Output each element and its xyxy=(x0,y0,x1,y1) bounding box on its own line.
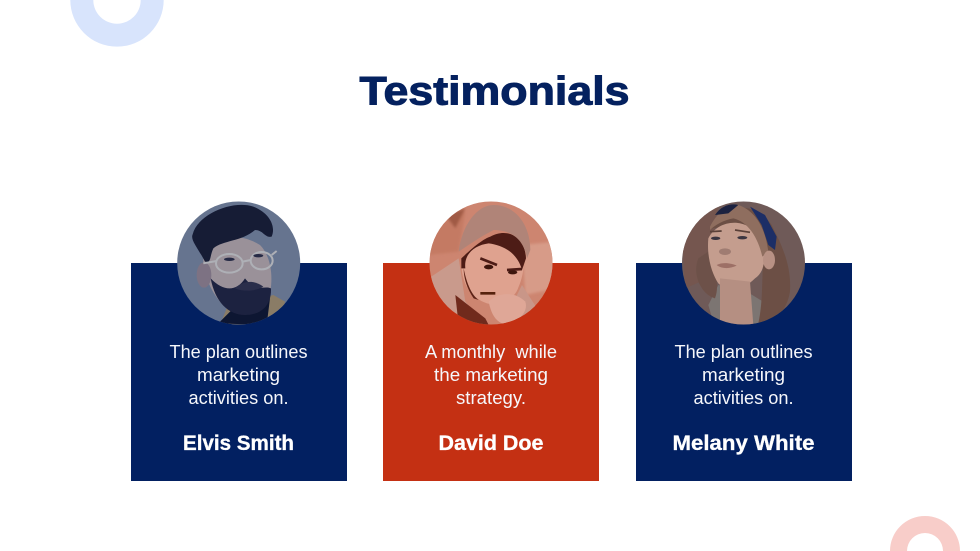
testimonial text xyxy=(425,342,557,408)
testimonial text: activities on. xyxy=(188,388,288,408)
decorative ring: top left xyxy=(70,0,164,47)
testimonial text: The plan outlines xyxy=(674,342,812,362)
testimonial text: The plan outlines xyxy=(170,342,308,362)
testimonial text: the marketing xyxy=(434,365,548,385)
card background xyxy=(636,263,852,481)
name: David Doe xyxy=(438,432,544,455)
title: Testimonials xyxy=(360,70,630,114)
testimonial text: strategy. xyxy=(456,388,526,408)
decorative ring: bottom right xyxy=(890,516,960,551)
testimonial text: marketing xyxy=(197,365,280,385)
portrait: Elvis Smith xyxy=(177,201,301,328)
name: Elvis Smith xyxy=(183,432,294,455)
testimonial text: marketing xyxy=(702,365,785,385)
panel: Elvis Smith xyxy=(131,201,347,481)
name: Melany White xyxy=(672,432,814,455)
testimonial text xyxy=(170,342,308,408)
panel: Melany White xyxy=(636,201,852,481)
panel: David Doe xyxy=(383,201,599,481)
card background xyxy=(131,263,347,481)
portrait: David Doe xyxy=(429,201,555,328)
testimonial text xyxy=(674,342,812,408)
testimonial text: activities on. xyxy=(694,388,794,408)
portrait: Melany White xyxy=(682,201,806,328)
card background xyxy=(383,263,599,481)
testimonial text: A monthly while xyxy=(425,342,557,362)
